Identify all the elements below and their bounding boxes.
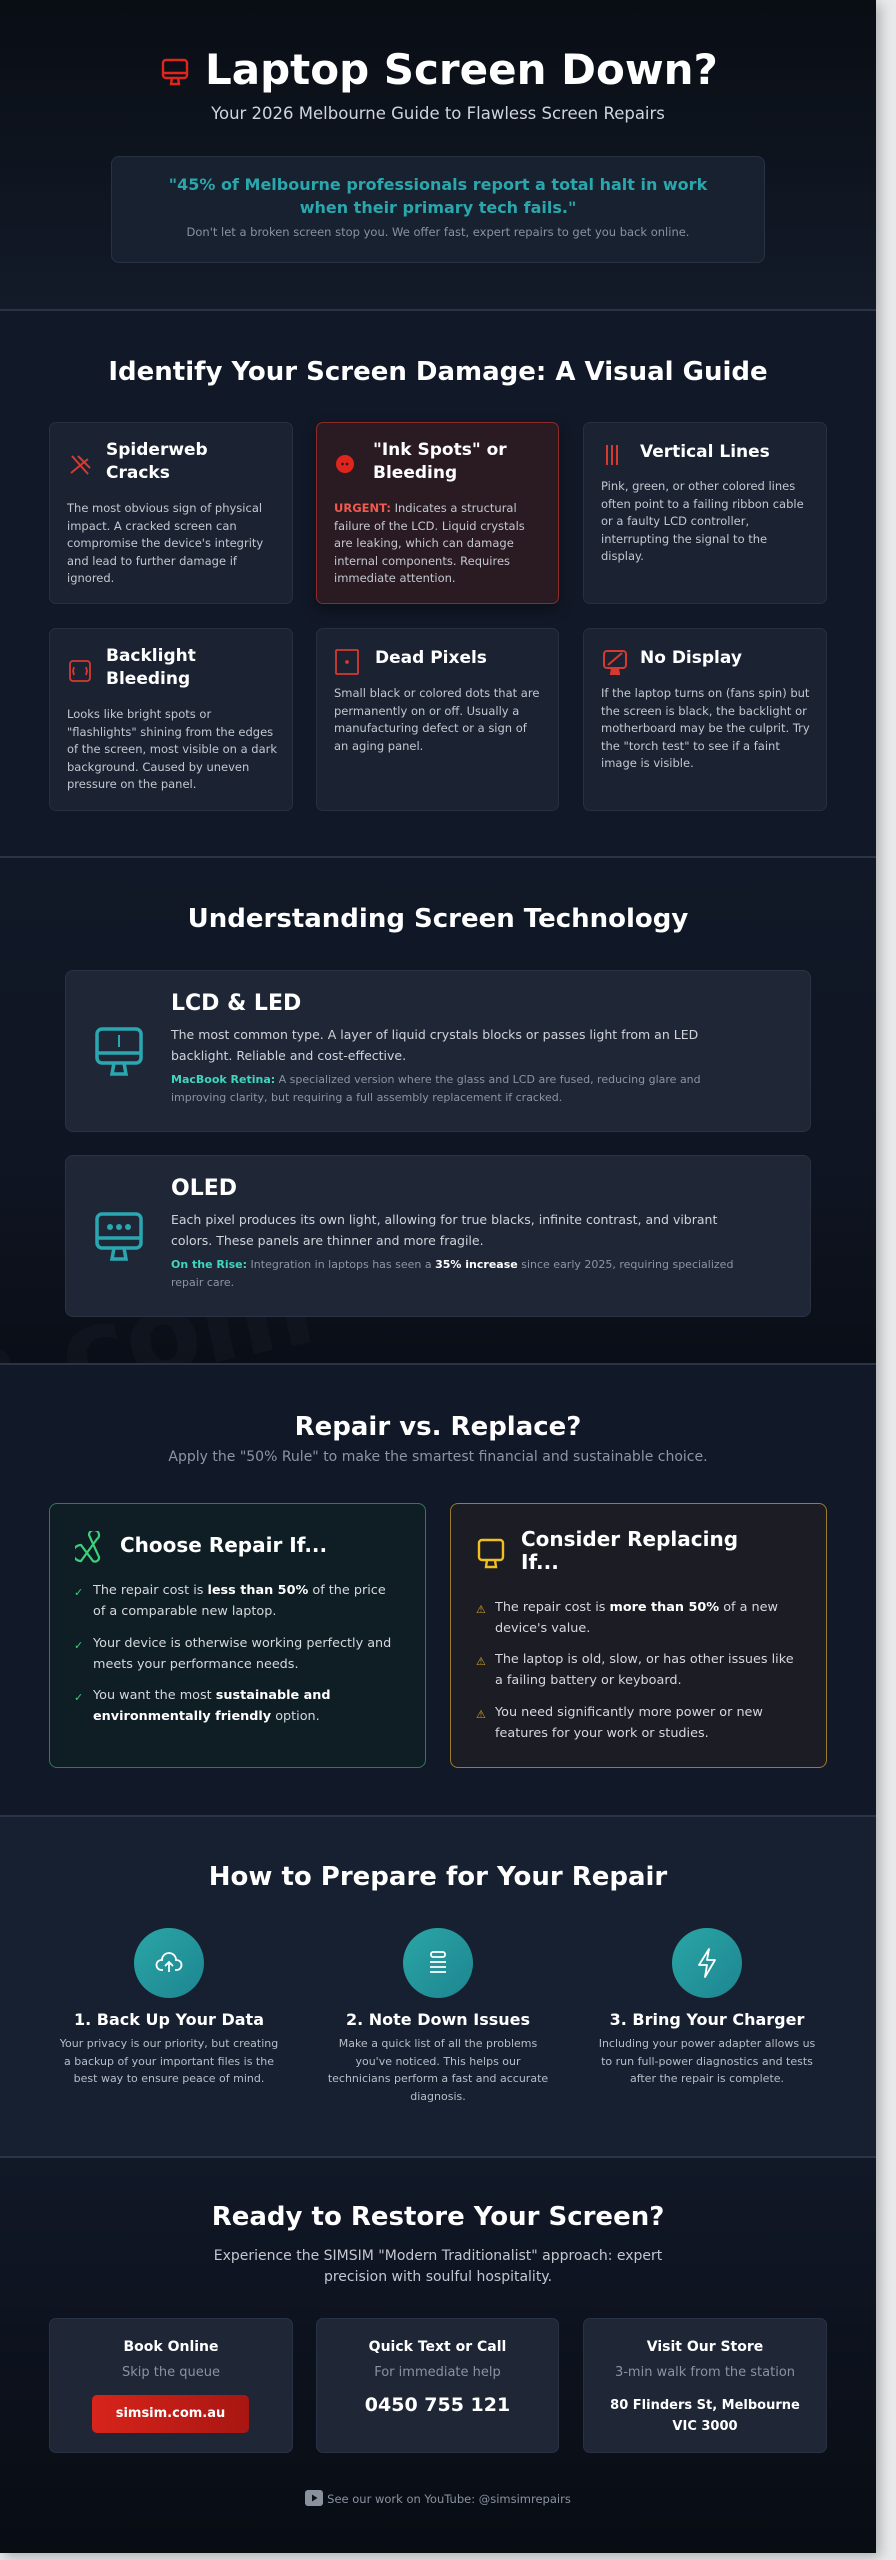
cta: call <box>316 2318 559 2453</box>
card: ink spots <box>316 422 559 604</box>
card: dead pixels: Small black or colored dots that are permanently on or off. Usually a manufacturing defect or a sign of an aging panel. <box>334 686 539 753</box>
panel: consider replacing <box>450 1503 827 1768</box>
cta: call: For immediate help <box>374 2365 501 2380</box>
card: backlight: Bleeding <box>106 669 190 689</box>
card: spiderweb: Cracks <box>106 463 170 483</box>
card: no display <box>583 628 827 811</box>
card: vertical lines <box>583 422 827 604</box>
quote callout: "45% of Melbourne professionals report a total halt in work <box>169 175 707 194</box>
cta: store: VIC 3000 <box>672 2418 738 2434</box>
card: backlight: Looks like bright spots or "flashlights" shining from the edges of the screen, most visible on a dark background. Caused by uneven pressure on the panel. <box>67 707 277 791</box>
icon: oled monitor <box>95 1212 143 1261</box>
card: backlight: Backlight <box>106 646 196 666</box>
subtitle: Your 2026 Melbourne Guide to Flawless Screen Repairs <box>211 104 665 123</box>
tech card: LCD: The most common type. A layer of liquid crystals blocks or passes light from an LED backlight. Reliable and cost-effective. <box>171 1027 698 1062</box>
tech card: OLED: OLED <box>171 1176 237 1201</box>
heading: Understanding Screen Technology <box>188 904 688 934</box>
panel: choose repair: ✓ <box>74 1639 83 1652</box>
step 3 <box>599 1928 815 2085</box>
card: dead pixels: Dead Pixels <box>375 648 487 668</box>
cta: call: Quick Text or Call <box>369 2339 506 2355</box>
icon: list <box>403 1928 473 1998</box>
card: spiderweb: Spiderweb <box>106 440 208 460</box>
subtitle: Experience the SIMSIM "Modern Traditionalist" approach: expert <box>214 2248 662 2264</box>
title: Laptop Screen Down? <box>205 45 718 94</box>
cta: store <box>583 2318 827 2453</box>
heading: Ready to Restore Your Screen? <box>212 2202 664 2232</box>
tech card: LCD <box>65 970 811 1132</box>
subtitle <box>214 2248 662 2284</box>
icon: tools <box>75 1531 100 1563</box>
panel: consider replacing: ⚠ <box>476 1708 486 1721</box>
button <box>92 2395 249 2433</box>
icon: bolt <box>672 1928 742 1998</box>
icon: no display <box>603 650 627 675</box>
cta: book online <box>49 2318 293 2453</box>
title: Choose Repair If... <box>120 1533 327 1557</box>
section: repair vs replace <box>0 1365 876 1816</box>
icon: pixel <box>335 649 359 675</box>
quote callout: Don't let a broken screen stop you. We offer fast, expert repairs to get you back online. <box>187 225 689 239</box>
step 2: Make a quick list of all the problems you've noticed. This helps our technicians perform a fast and accurate diagnosis. <box>328 2037 548 2102</box>
card: ink spots: "Ink Spots" or <box>373 440 507 460</box>
tech card: LCD: LCD & LED <box>171 991 301 1016</box>
hero section <box>0 0 876 310</box>
title: If... <box>521 1550 559 1574</box>
section: screen technology <box>0 858 876 1364</box>
panel: choose repair: ✓ <box>74 1586 83 1599</box>
card: dead pixels <box>316 628 559 811</box>
card: ink spots: URGENT: Indicates a structural failure of the LCD. Liquid crystals are leaking, which can damage internal components. Requires immediate attention. <box>334 501 525 585</box>
cta: book online: Book Online <box>123 2339 219 2355</box>
heading: How to Prepare for Your Repair <box>209 1862 667 1892</box>
tech card: OLED: On the Rise: Integration in laptops has seen a 35% increase since early 2025, requiring specialized repair care. <box>171 1258 733 1289</box>
step 3: Including your power adapter allows us to run full-power diagnostics and tests after the repair is complete. <box>599 2037 815 2085</box>
icon: laptop red <box>162 58 188 86</box>
panel: consider replacing: ⚠ <box>476 1655 486 1668</box>
section: damage guide <box>0 311 876 857</box>
icon: youtube <box>305 2490 323 2506</box>
panel: choose repair <box>49 1503 426 1768</box>
list item 2: Your device is otherwise working perfectly and meets your performance needs. <box>93 1636 391 1672</box>
card: spiderweb <box>49 422 293 604</box>
card: vertical lines: Pink, green, or other colored lines often point to a failing ribbon cable or a faulty LCD controller, interrupting the signal to the display. <box>601 479 804 563</box>
card: no display: If the laptop turns on (fans spin) but the screen is black, the backlight or motherboard may be the culprit. Try the "torch test" to see if a faint image is visible. <box>601 686 810 770</box>
heading: Identify Your Screen Damage: A Visual Guide <box>108 357 768 387</box>
tech card: OLED <box>65 1155 811 1317</box>
youtube footer: See our work on YouTube: @simsimrepairs <box>327 2492 571 2506</box>
panel: choose repair: ✓ <box>74 1691 83 1704</box>
list item 1: The repair cost is more than 50% of a new device's value. <box>495 1600 778 1636</box>
card: spiderweb: The most obvious sign of physical impact. A cracked screen can compromise the device's integrity and lead to further damage if ignored. <box>67 501 263 585</box>
cta: call: 0450 755 121 <box>365 2394 510 2416</box>
icon: backlight <box>69 660 91 682</box>
tech card: OLED: Each pixel produces its own light, allowing for true blacks, infinite contrast, and vibrant colors. These panels are thinner and more fragile. <box>171 1212 717 1248</box>
icon: lcd monitor <box>95 1027 143 1076</box>
icon: crack <box>70 455 91 475</box>
tech card: LCD: MacBook Retina: A specialized version where the glass and LCD are fused, reducing glare and improving clarity, but requiring a full assembly replacement if cracked. <box>171 1073 701 1104</box>
cta: store: Visit Our Store <box>647 2339 763 2355</box>
step 2: 2. Note Down Issues <box>346 2010 530 2029</box>
step 2 <box>328 1928 548 2102</box>
icon: cloud upload <box>134 1928 204 1998</box>
cta: store: 80 Flinders St, Melbourne <box>610 2398 800 2413</box>
card: backlight <box>49 628 293 811</box>
card: ink spots: Bleeding <box>373 463 457 483</box>
card: vertical lines: Vertical Lines <box>640 442 770 462</box>
cta: store: 3-min walk from the station <box>615 2365 795 2380</box>
subtitle: precision with soulful hospitality. <box>324 2268 552 2284</box>
title <box>521 1527 738 1574</box>
subtitle: Apply the "50% Rule" to make the smartest financial and sustainable choice. <box>168 1449 708 1465</box>
heading: Repair vs. Replace? <box>295 1412 581 1442</box>
list item 2: The laptop is old, slow, or has other issues like a failing battery or keyboard. <box>495 1652 794 1688</box>
button: simsim.com.au <box>116 2406 225 2421</box>
icon: lines <box>606 445 618 465</box>
step 3: 3. Bring Your Charger <box>610 2010 804 2029</box>
cta: book online: Skip the queue <box>122 2365 220 2380</box>
icon: monitor yellow <box>478 1538 504 1568</box>
quote callout: when their primary tech fails." <box>300 198 576 217</box>
section: call to action <box>0 2158 876 2553</box>
section: prepare <box>0 1817 876 2157</box>
title: Consider Replacing <box>521 1527 738 1551</box>
list item 3: You want the most sustainable and environmentally friendly option. <box>93 1688 331 1724</box>
panel: consider replacing: ⚠ <box>476 1603 486 1616</box>
list item 3: You need significantly more power or new features for your work or studies. <box>495 1705 763 1740</box>
step 1 <box>60 1928 278 2085</box>
icon: ink drop <box>336 455 354 473</box>
quote callout <box>111 156 765 263</box>
list item 1: The repair cost is less than 50% of the price of a comparable new laptop. <box>93 1583 386 1618</box>
card: no display: No Display <box>640 648 742 668</box>
step 1: Your privacy is our priority, but creating a backup of your important files is the best way to ensure peace of mind. <box>60 2037 278 2085</box>
step 1: 1. Back Up Your Data <box>74 2010 264 2029</box>
